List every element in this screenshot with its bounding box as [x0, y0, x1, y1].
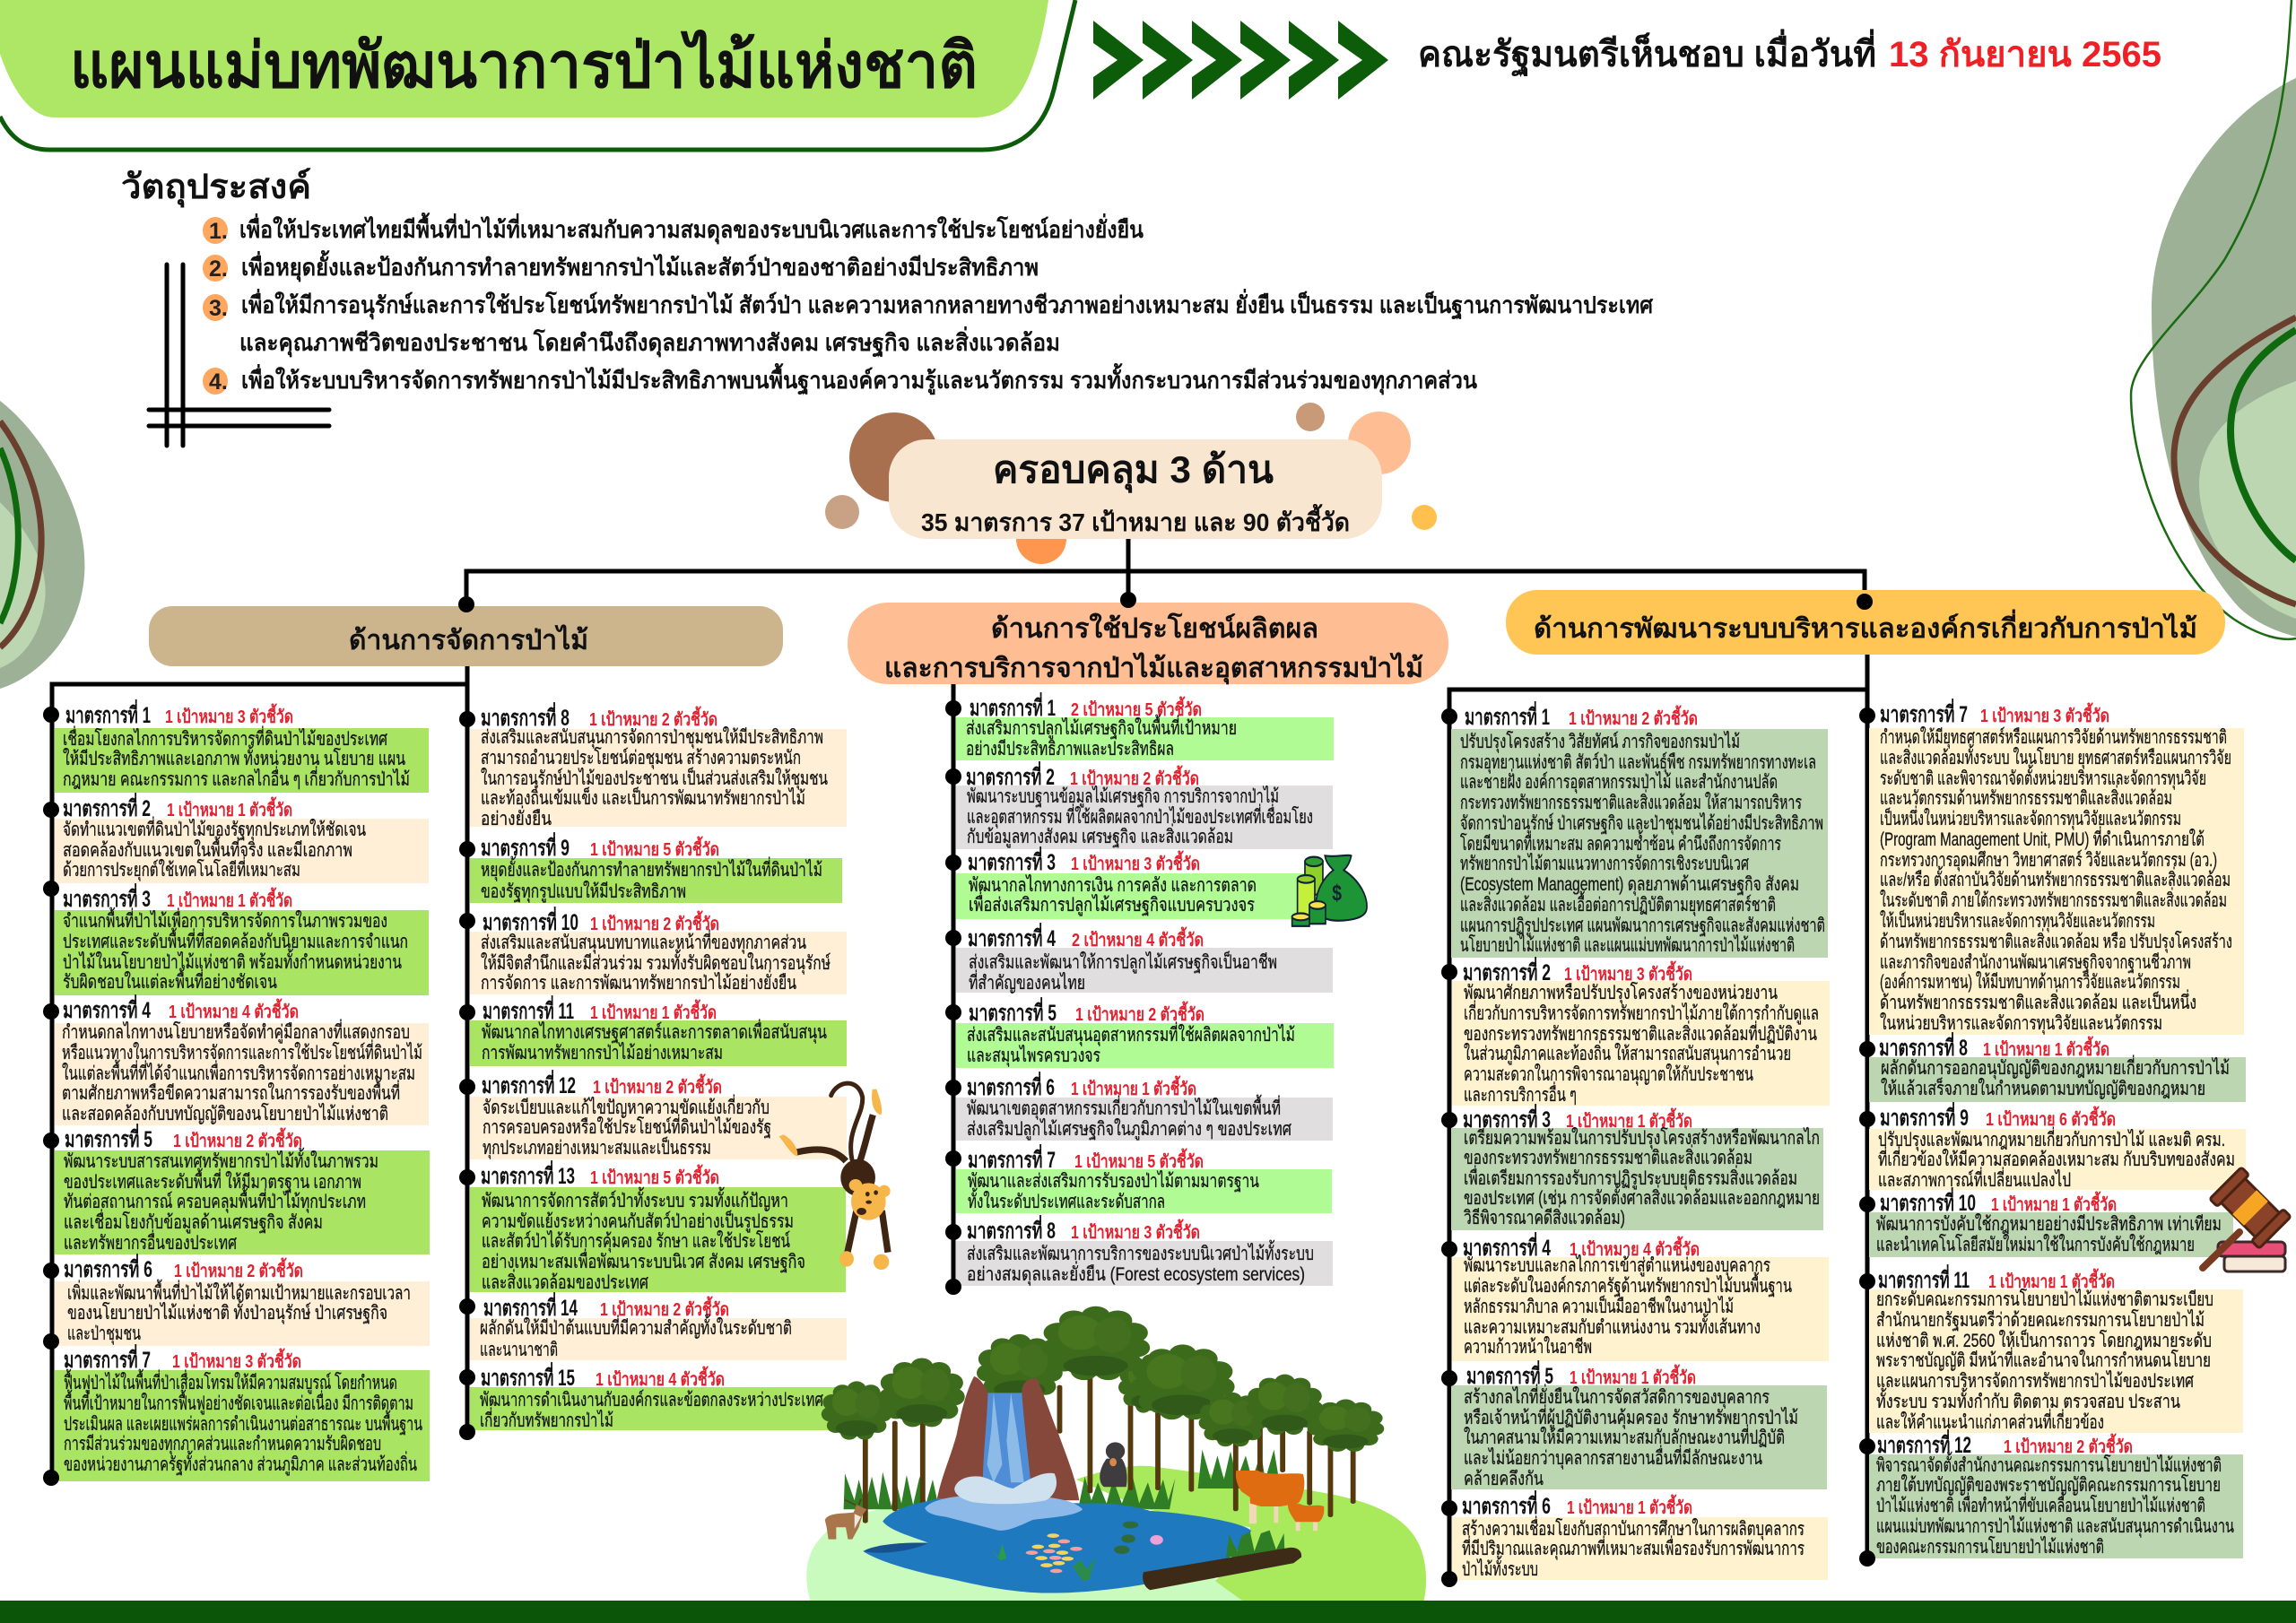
- measure 2: ด้วยการประยุกต์ใช้เทคโนโลยีที่เหมาะสม: [63, 856, 300, 881]
- measure 4: ในแต่ละพื้นที่ที่ได้จำแนกเพื่อการบริหารจัดการอย่างเหมาะสม: [62, 1060, 415, 1084]
- measure 5: สร้างกลไกที่ยั่งยืนในการจัดสวัสดิการของบุคลากร: [1464, 1384, 1770, 1409]
- measure 8: มาตรการที่ 8: [481, 702, 570, 731]
- measure 3: ป่าไม้ในนโยบายป่าไม้แห่งชาติ พร้อมทั้งกำหนดหน่วยงาน: [63, 949, 402, 973]
- measure 3: ประเทศและระดับพื้นที่ที่สอดคล้องกับนิยามและการจำแนก: [63, 928, 408, 952]
- measure 2: และอุตสาหกรรม ที่ใช้ผลิตผลจากป่าไม้ของประเทศที่เชื่อมโยง: [967, 803, 1313, 829]
- measure 2: ของกระทรวงทรัพยากรธรรมชาติและสิ่งแวดล้อมที่ปฏิบัติงาน: [1464, 1020, 1817, 1045]
- measure 5: หรือเจ้าหน้าที่ผู้ปฏิบัติงานคุ้มครอง รักษาทรัพยากรป่าไม้: [1464, 1404, 1798, 1429]
- measure 2: [1441, 957, 1830, 1106]
- measure 15: พัฒนาการดำเนินงานกับองค์กรและข้อตกลงระหว่างประเทศ: [480, 1389, 823, 1410]
- objective 3: และคุณภาพชีวิตของประชาชน โดยคำนึงถึงดุลยภาพทางสังคม เศรษฐกิจ และสิ่งแวดล้อม: [239, 325, 1060, 359]
- measure 4: ความก้าวหน้าในอาชีพ: [1464, 1336, 1592, 1358]
- measure 4: ส่งเสริมและพัฒนาให้การปลูกไม้เศรษฐกิจเป็นอาชีพ: [969, 950, 1277, 974]
- water pool: [863, 1499, 1251, 1593]
- measure 9: 1 เป้าหมาย 6 ตัวชี้วัด: [1986, 1106, 2116, 1130]
- measure 3: เตรียมความพร้อมในการปรับปรุงโครงสร้างหรือพัฒนากลไก: [1464, 1127, 1820, 1150]
- measure 4: และความเหมาะสมกับตำแหน่งงาน รวมทั้งเส้นทาง: [1464, 1314, 1761, 1338]
- measure 5: ส่งเสริมและสนับสนุนอุตสาหกรรมที่ใช้ผลิตผลจากป่าไม้: [967, 1021, 1295, 1046]
- objectives list: [203, 212, 1653, 396]
- measure 5: พัฒนาระบบสารสนเทศทรัพยากรป่าไม้ทั้งในภาพรวม: [64, 1148, 378, 1172]
- icon: money bag and coins: $: [1332, 881, 1342, 906]
- measure 7: ฟื้นฟูป่าไม้ในพื้นที่ป่าเสื่อมโทรมให้มีความสมบูรณ์ โดยกำหนด: [64, 1369, 397, 1394]
- title: แผนแม่บทพัฒนาการป่าไม้แห่งชาติ: [70, 29, 978, 100]
- measure 5: และไม่น้อยกว่าบุคลากรสายงานอื่นที่มีลักษณะงาน: [1464, 1445, 1762, 1470]
- measure 10: 1 เป้าหมาย 2 ตัวชี้วัด: [590, 910, 719, 934]
- measure 4: ที่สำคัญของคนไทย: [969, 969, 1085, 994]
- decoration: left leaf blob: [0, 401, 84, 689]
- measure 1: กรมอุทยานแห่งชาติ สัตว์ป่า และพันธุ์พืช กรมทรัพยากรทางทะเล: [1460, 751, 1816, 774]
- measure 10: [459, 907, 847, 994]
- measure 4: พัฒนาระบบและกลไกการเข้าสู่ตำแหน่งของบุคลากร: [1464, 1254, 1770, 1277]
- heading pill: administration: [1506, 590, 2225, 655]
- measure 1: ปรับปรุงโครงสร้าง วิสัยทัศน์ ภารกิจของกรมป่าไม้: [1460, 731, 1740, 753]
- measure 4: กำหนดกลไกทางนโยบายหรือจัดทำคู่มือกลางที่แสดงกรอบ: [62, 1019, 410, 1044]
- measure 7: 1 เป้าหมาย 5 ตัวชี้วัด: [1074, 1148, 1204, 1172]
- cabinet approval date: 13 กันยายน 2565: [1889, 35, 2161, 74]
- measure 13: พัฒนาการจัดการสัตว์ป่าทั้งระบบ รวมทั้งแก้ปัญหา: [482, 1187, 788, 1211]
- icon: money bag and coins: [1292, 855, 1367, 926]
- measure 6: 1 เป้าหมาย 2 ตัวชี้วัด: [174, 1257, 303, 1281]
- measure 1: โดยมีขนาดที่เหมาะสม ลดความซ้ำซ้อน คำนึงถึงการจัดการ: [1460, 830, 1781, 855]
- measure 13: อย่างเหมาะสมเพื่อพัฒนาระบบนิเวศ สังคม เศรษฐกิจ: [482, 1248, 805, 1272]
- measure 7: ทั้งในระดับประเทศและระดับสากล: [968, 1188, 1165, 1212]
- measure 7: ประเมินผล และเผยแพร่ผลการดำเนินงานต่อสาธารณะ บนพื้นฐาน: [64, 1410, 422, 1435]
- measure 1: และสิ่งแวดล้อม และเอื้อต่อการปฏิบัติตามยุทธศาสตร์ชาติ: [1460, 891, 1776, 916]
- tree trunks: [865, 1375, 1353, 1522]
- measure 4: 1 เป้าหมาย 4 ตัวชี้วัด: [1570, 1236, 1700, 1260]
- measure 11: 1 เป้าหมาย 1 ตัวชี้วัด: [590, 999, 717, 1023]
- measure 9: ของรัฐทุกรูปแบบให้มีประสิทธิภาพ: [481, 881, 686, 903]
- measure 2: พัฒนาศักยภาพหรือปรับปรุงโครงสร้างของหน่วยงาน: [1464, 982, 1778, 1004]
- measure 3: ของประเทศ (เช่น การจัดตั้งศาลสิ่งแวดล้อมและออกกฎหมาย: [1464, 1185, 1820, 1209]
- measure 4: 2 เป้าหมาย 4 ตัวชี้วัด: [1072, 926, 1204, 950]
- measure 8: [459, 702, 847, 829]
- measure 3: วิธีพิจารณาคดีสิ่งแวดล้อม): [1464, 1204, 1625, 1228]
- objective 3: [203, 288, 1653, 359]
- measure 2: พัฒนาระบบฐานข้อมูลไม้เศรษฐกิจ การบริการจากป่าไม้: [967, 785, 1279, 808]
- measure 12: 1 เป้าหมาย 2 ตัวชี้วัด: [2004, 1433, 2133, 1457]
- column 2: forest management measures 8-15: [459, 666, 847, 1440]
- measure 11: และแผนการบริหารจัดการทรัพยากรป่าไม้ของประเทศ: [1876, 1370, 2194, 1392]
- measure 14: [459, 1292, 847, 1360]
- objective 4: เพื่อให้ระบบบริหารจัดการทรัพยากรป่าไม้มีประสิทธิภาพบนพื้นฐานองค์ความรู้และนวัตกรรม รวมทั้งกระบวนการมีส่วนร่วมของทุกภาคส่วน: [241, 362, 1477, 396]
- measure 11: การพัฒนาทรัพยากรป่าไม้อย่างเหมาะสม: [482, 1042, 723, 1063]
- measure 1: แผนการปฏิรูปประเทศ แผนพัฒนาการเศรษฐกิจและสังคมแห่งชาติ: [1460, 916, 1825, 937]
- measure 5: 1 เป้าหมาย 2 ตัวชี้วัด: [1075, 1001, 1205, 1025]
- measure 15: มาตรการที่ 15: [481, 1362, 575, 1391]
- measure 6: และป่าชุมชน: [67, 1324, 141, 1345]
- column 1: forest management measures 1-7: [43, 684, 430, 1486]
- measure 7: การมีส่วนร่วมของทุกภาคส่วนและกำหนดความรับผิดชอบ: [64, 1434, 381, 1455]
- measure 6: 1 เป้าหมาย 1 ตัวชี้วัด: [1567, 1494, 1692, 1518]
- measure 7: ให้เป็นหน่วยบริหารและจัดการทุนวิจัยและนวัตกรรม: [1880, 908, 2155, 933]
- measure 13: และสิ่งแวดล้อมของประเทศ: [482, 1269, 648, 1293]
- measure 1: เชื่อมโยงกลไกการบริหารจัดการที่ดินป่าไม้ของประเทศ: [63, 725, 387, 750]
- measure 13: 1 เป้าหมาย 5 ตัวชี้วัด: [590, 1164, 719, 1188]
- measure 1: 1 เป้าหมาย 2 ตัวชี้วัด: [1569, 705, 1698, 729]
- decorative circles around summary: [825, 403, 1437, 564]
- measure 5: ทันต่อสถานการณ์ ครอบคลุมพื้นที่ป่าไม้ทุกประเภท: [64, 1188, 366, 1213]
- measure 7: [945, 1144, 1332, 1213]
- measure 4: หรือแนวทางในการบริหารจัดการและการใช้ประโยชน์ที่ดินป่าไม้: [62, 1039, 422, 1063]
- measure 4: มาตรการที่ 4: [63, 994, 151, 1023]
- measure 8: 1 เป้าหมาย 2 ตัวชี้วัด: [589, 706, 718, 730]
- measure 8: มาตรการที่ 8: [967, 1215, 1056, 1244]
- measure 10: มาตรการที่ 10: [1880, 1187, 1976, 1216]
- measure 14: มาตรการที่ 14: [483, 1292, 578, 1321]
- measure 4: 1 เป้าหมาย 4 ตัวชี้วัด: [169, 998, 299, 1022]
- measure 1: มาตรการที่ 1: [65, 699, 151, 728]
- measure 1: ทรัพยากรป่าไม้ตามแนวทางการจัดการเชิงระบบนิเวศ: [1460, 853, 1749, 874]
- measure 5: [1441, 1360, 1827, 1489]
- measure 8: 1 เป้าหมาย 3 ตัวชี้วัด: [1071, 1219, 1200, 1243]
- measure 12: มาตรการที่ 12: [482, 1070, 576, 1098]
- measure 10: 1 เป้าหมาย 1 ตัวชี้วัด: [1991, 1191, 2117, 1215]
- measure 7: มาตรการที่ 7: [968, 1144, 1056, 1173]
- fish school: [1026, 1533, 1083, 1573]
- measure 7: พัฒนาและส่งเสริมการรับรองป่าไม้ตามมาตรฐาน: [968, 1170, 1259, 1192]
- measure 10: ส่งเสริมและสนับสนุนบทบาทและหน้าที่ของทุกภาคส่วน: [481, 929, 806, 954]
- measure 7: ของหน่วยงานภาครัฐทั้งส่วนกลาง ส่วนภูมิภาค และส่วนท้องถิ่น: [64, 1451, 417, 1476]
- measure 6: [945, 1072, 1333, 1141]
- measure 7: 1 เป้าหมาย 3 ตัวชี้วัด: [172, 1348, 301, 1372]
- measure 7: 1 เป้าหมาย 3 ตัวชี้วัด: [1980, 702, 2109, 726]
- measure 6: มาตรการที่ 6: [64, 1254, 152, 1282]
- decoration: double cross lines: [149, 265, 329, 446]
- measure 14: ผลักดันให้มีป่าต้นแบบที่มีความสำคัญทั้งในระดับชาติ: [480, 1315, 792, 1339]
- measure 8: และท้องถิ่นเข้มแข็ง และเป็นการพัฒนาทรัพยากรป่าไม้: [481, 785, 805, 809]
- measure 8: [1859, 1032, 2246, 1102]
- measure 1: และชายฝั่ง องค์การอุตสาหกรรมป่าไม้ และสำนักงานปลัด: [1460, 768, 1778, 794]
- measure 11: พัฒนากลไกทางเศรษฐศาสตร์และการตลาดเพื่อสนับสนุน: [482, 1019, 827, 1044]
- measure 4: [1441, 1232, 1829, 1361]
- measure 7: ในหน่วยบริหารและจัดการทุนวิจัยและนวัตกรรม: [1880, 1012, 2162, 1035]
- measure 6: [1441, 1490, 1828, 1587]
- measure 1: ให้มีประสิทธิภาพและเอกภาพ ทั้งหน่วยงาน นโยบาย แผน: [63, 745, 405, 769]
- heading pill: utilisation: ด้านการใช้ประโยชน์ผลิตผล: [991, 612, 1318, 644]
- illustration: forest and waterfall scene: [806, 1306, 1426, 1601]
- measure 2: มาตรการที่ 2: [1463, 957, 1551, 985]
- animal: deer: [825, 1499, 866, 1540]
- measure 15: [459, 1362, 847, 1440]
- summary box: covers 3 areas: [889, 439, 1382, 539]
- measure 7: [43, 1333, 430, 1486]
- measure 13: และสัตว์ป่าได้รับการคุ้มครอง รักษา และใช้ประโยชน์: [482, 1230, 790, 1253]
- measure 11: [1859, 1264, 2243, 1433]
- measure 7: มาตรการที่ 7: [64, 1344, 151, 1373]
- measure 7: ด้านทรัพยากรธรรมชาติและสิ่งแวดล้อม และเป็นหนึ่ง: [1880, 989, 2196, 1013]
- measure 3: มาตรการที่ 3: [63, 883, 151, 912]
- measure 5: มาตรการที่ 5: [969, 997, 1057, 1026]
- measure 1: นโยบายป่าไม้แห่งชาติ และแผนแม่บทพัฒนาการป่าไม้แห่งชาติ: [1460, 934, 1795, 956]
- measure 4: [945, 923, 1333, 994]
- measure 1: ส่งเสริมการปลูกไม้เศรษฐกิจในพื้นที่เป้าหมาย: [966, 715, 1237, 740]
- heading: covers 3 areas: ครอบคลุม 3 ด้าน: [993, 448, 1274, 493]
- measure 8: ในการอนุรักษ์ป่าไม้ของประชาชน เป็นส่วนส่งเสริมให้ชุมชน: [481, 766, 828, 790]
- column 5: administration measures 7-12: [1859, 655, 2246, 1567]
- measure 11: มาตรการที่ 11: [1878, 1264, 1970, 1293]
- heading pill: utilisation: [848, 603, 1448, 685]
- heading pill: administration: ด้านการพัฒนาระบบบริหารและองค์กรเกี่ยวกับการป่าไม้: [1534, 609, 2197, 644]
- measure 1: อย่างมีประสิทธิภาพและประสิทธิผล: [966, 739, 1174, 759]
- measure 8: อย่างสมดุลและยั่งยืน (Forest ecosystem services): [967, 1261, 1305, 1286]
- measure 11: ทั้งระบบ รวมทั้งกำกับ ติดตาม ตรวจสอบ ประสาน: [1876, 1388, 2180, 1412]
- measure 5: 1 เป้าหมาย 2 ตัวชี้วัด: [173, 1127, 302, 1151]
- measure 3: เพื่อเตรียมการรองรับการปฏิรูประบบยุติธรรมสิ่งแวดล้อม: [1464, 1165, 1797, 1190]
- measure 7: มาตรการที่ 7: [1880, 699, 1968, 727]
- measure 4: มาตรการที่ 4: [1463, 1232, 1551, 1261]
- measure 1: มาตรการที่ 1: [970, 692, 1056, 721]
- measure 8: 1 เป้าหมาย 1 ตัวชี้วัด: [1983, 1036, 2109, 1060]
- measure 6: มาตรการที่ 6: [967, 1072, 1055, 1100]
- measure 6: 1 เป้าหมาย 1 ตัวชี้วัด: [1071, 1075, 1196, 1099]
- objective 1: เพื่อให้ประเทศไทยมีพื้นที่ป่าไม้ที่เหมาะสมกับความสมดุลของระบบนิเวศและการใช้ประโยชน์อย่างยั่งยืน: [239, 212, 1144, 245]
- measure 2: 1 เป้าหมาย 2 ตัวชี้วัด: [1070, 765, 1199, 789]
- measure 5: มาตรการที่ 5: [65, 1124, 152, 1152]
- measure 4: และสอดคล้องกับบทบัญญัติของนโยบายป่าไม้แห่งชาติ: [62, 1103, 388, 1124]
- measure 11: มาตรการที่ 11: [483, 995, 574, 1024]
- measure 2: [43, 793, 429, 883]
- measure 3: [945, 846, 1315, 919]
- measure 9: หยุดยั้งและป้องกันการทำลายทรัพยากรป่าไม้ในที่ดินป่าไม้: [481, 856, 822, 881]
- measure 7: [1859, 699, 2244, 1035]
- column 3: utilisation measures 1-8: [945, 684, 1334, 1295]
- measure 5: 1 เป้าหมาย 1 ตัวชี้วัด: [1570, 1364, 1696, 1388]
- measure 15: 1 เป้าหมาย 4 ตัวชี้วัด: [596, 1366, 725, 1390]
- measure 2: จัดทำแนวเขตที่ดินป่าไม้ของรัฐทุกประเภทให้ชัดเจน: [63, 816, 366, 841]
- measure 10: [1859, 1187, 2233, 1257]
- measure 2: และการบริการอื่น ๆ: [1464, 1081, 1577, 1106]
- objective 4: 4.: [209, 369, 228, 395]
- measure 6: ป่าไม้ทั้งระบบ: [1462, 1556, 1538, 1580]
- measure 9: มาตรการที่ 9: [481, 832, 570, 861]
- measure 12: ของคณะกรรมการนโยบายป่าไม้แห่งชาติ: [1876, 1536, 2104, 1558]
- measure 6: พัฒนาเขตอุตสาหกรรมเกี่ยวกับการป่าไม้ในเขตพื้นที่: [967, 1095, 1281, 1120]
- measure 3: เพื่อส่งเสริมการปลูกไม้เศรษฐกิจแบบครบวงจร: [969, 891, 1255, 916]
- cabinet approval date: คณะรัฐมนตรีเห็นชอบ เมื่อวันที่: [1418, 29, 1876, 78]
- measure 1: 2 เป้าหมาย 5 ตัวชี้วัด: [1071, 696, 1202, 720]
- summary counts: 35 มาตรการ 37 เป้าหมาย และ 90 ตัวชี้วัด: [921, 503, 1350, 536]
- bottom bar: [0, 1601, 2296, 1623]
- measure 2: สอดคล้องกับแนวเขตในพื้นที่จริง และมีเอกภาพ: [63, 837, 352, 861]
- measure 1: กฎหมาย คณะกรรมการ และกลไกอื่น ๆ เกี่ยวกับการป่าไม้: [63, 766, 410, 790]
- measure 1: (Ecosystem Management) ดุลยภาพด้านเศรษฐกิจ สังคม: [1460, 874, 1799, 896]
- water plants and lotus: [991, 1522, 1163, 1581]
- measure 5: มาตรการที่ 5: [1466, 1360, 1553, 1389]
- measure 6: ของนโยบายป่าไม้แห่งชาติ ทั้งป่าอนุรักษ์ ป่าเศรษฐกิจ: [67, 1299, 387, 1324]
- ground: [806, 1466, 1426, 1601]
- measure 3: [43, 881, 429, 995]
- measure 5: ในภาคสนามให้มีความเหมาะสมกับลักษณะงานที่ปฏิบัติ: [1464, 1424, 1785, 1448]
- front grass: [1226, 1531, 1285, 1558]
- measure 5: และทรัพยากรอื่นของประเทศ: [64, 1229, 237, 1254]
- measure 9: และสภาพการณ์ที่เปลี่ยนแปลงไป: [1878, 1167, 2071, 1191]
- measure 3: 1 เป้าหมาย 3 ตัวชี้วัด: [1071, 850, 1200, 874]
- measure 4: [43, 994, 429, 1125]
- measure 7: พื้นที่เป้าหมายในการฟื้นฟูอย่างชัดเจนและต่อเนื่อง มีการติดตาม: [64, 1390, 413, 1415]
- objective 2: 2.: [209, 256, 228, 282]
- measure 3: ของกระทรวงทรัพยากรธรรมชาติและสิ่งแวดล้อม: [1464, 1144, 1752, 1168]
- decoration: right leaf blob: [2131, 0, 2296, 639]
- tree crowns: [822, 1306, 1384, 1452]
- measure 8: อย่างยั่งยืน: [481, 805, 552, 829]
- measure 13: ความขัดแย้งระหว่างคนกับสัตว์ป่าอย่างเป็นรูปธรรม: [482, 1209, 794, 1233]
- measure 10: มาตรการที่ 10: [483, 907, 578, 935]
- measure 12: 1 เป้าหมาย 2 ตัวชี้วัด: [593, 1073, 722, 1098]
- measure 11: [459, 995, 847, 1066]
- measure 1: มาตรการที่ 1: [1465, 701, 1550, 730]
- measure 4: มาตรการที่ 4: [968, 923, 1056, 951]
- connector dots on pills: [458, 592, 1873, 612]
- heading pill: utilisation: และการบริการจากป่าไม้และอุตสาหกรรมป่าไม้: [884, 652, 1423, 685]
- measure 2: 1 เป้าหมาย 1 ตัวชี้วัด: [167, 796, 292, 820]
- measure 2: เกี่ยวกับการบริหารจัดการทรัพยากรป่าไม้ภายใต้การกำกับดูแล: [1464, 1000, 1819, 1025]
- measure 12: ทุกประเภทอย่างเหมาะสมและเป็นธรรม: [483, 1135, 711, 1159]
- measure 5: [43, 1124, 430, 1254]
- measure 2: [945, 761, 1333, 849]
- animal: cow and calf: [1236, 1471, 1324, 1531]
- icon: chevron arrows: [1093, 21, 1388, 100]
- column 4: administration measures 1-6: [1441, 690, 1830, 1587]
- heading pill: forest management: [149, 606, 783, 666]
- icon: monkey: [779, 1083, 891, 1270]
- measure 2: กับข้อมูลทางสังคม เศรษฐกิจ และสิ่งแวดล้อม: [967, 823, 1233, 848]
- header title banner: [0, 0, 1075, 150]
- measure 14: 1 เป้าหมาย 2 ตัวชี้วัด: [600, 1296, 729, 1320]
- measure 8: สามารถอำนวยประโยชน์ต่อชุมชน สร้างความตระหนัก: [481, 747, 801, 769]
- measure 1: กระทรวงทรัพยากรธรรมชาติและสิ่งแวดล้อม ให้สามารถบริหาร: [1460, 789, 1802, 813]
- measure 1: จัดการป่าอนุรักษ์ ป่าเศรษฐกิจ และป่าชุมชนได้อย่างมีประสิทธิภาพ: [1460, 812, 1823, 835]
- measure 2: มาตรการที่ 2: [63, 793, 151, 821]
- measure 9: 1 เป้าหมาย 5 ตัวชี้วัด: [590, 836, 719, 860]
- measure 4: หลักธรรมาภิบาล ความเป็นมืออาชีพในงานป่าไม้: [1464, 1294, 1734, 1317]
- measure 13: [459, 1160, 846, 1293]
- measure 6: ที่มีปริมาณและคุณภาพที่เหมาะสมเพื่อรองรับการพัฒนาการ: [1462, 1535, 1805, 1560]
- measure 10: ให้มีจิตสำนึกและมีส่วนร่วม รวมทั้งรับผิดชอบในการอนุรักษ์: [481, 950, 831, 975]
- measure 5: และสมุนไพรครบวงจร: [967, 1045, 1100, 1067]
- measure 1: [1441, 701, 1828, 958]
- measure 5: [945, 997, 1334, 1068]
- measure 6: [43, 1254, 430, 1346]
- measure 6: ส่งเสริมปลูกไม้เศรษฐกิจในภูมิภาคต่าง ๆ ของประเทศ: [967, 1118, 1292, 1141]
- measure 3: พัฒนากลไกทางการเงิน การคลัง และการตลาด: [969, 874, 1257, 896]
- measure 9: [459, 832, 842, 903]
- measure 2: มาตรการที่ 2: [966, 761, 1055, 790]
- objective 3: เพื่อให้มีการอนุรักษ์และการใช้ประโยชน์ทรัพยากรป่าไม้ สัตว์ป่า และความหลากหลายทางชีวภาพอย่างเหมาะสม ยั่งยืน เป็นธรรม และเป็นฐานการพัฒนาประเทศ: [241, 288, 1653, 321]
- measure 12: มาตรการที่ 12: [1877, 1429, 1971, 1458]
- measure 6: สร้างความเชื่อมโยงกับสถาบันการศึกษาในการผลิตบุคลากร: [1462, 1515, 1805, 1541]
- measure 6: มาตรการที่ 6: [1462, 1490, 1551, 1519]
- cabinet approval date: [1418, 29, 2161, 78]
- fallen log: [1143, 1548, 1301, 1590]
- icon: gavel and books: [2203, 1167, 2291, 1271]
- waterfall and splash: [925, 1393, 1083, 1531]
- waterfall rocks: [937, 1376, 1079, 1500]
- measure 3: รับผิดชอบในแต่ละพื้นที่อย่างชัดเจน: [63, 968, 277, 993]
- measure 12: [459, 1070, 847, 1159]
- measure 8: มาตรการที่ 8: [1879, 1032, 1968, 1061]
- measure 3: 1 เป้าหมาย 1 ตัวชี้วัด: [1566, 1107, 1692, 1132]
- measure 9: มาตรการที่ 9: [1880, 1102, 1969, 1131]
- measure 11: 1 เป้าหมาย 1 ตัวชี้วัด: [1988, 1268, 2115, 1292]
- measure 3: มาตรการที่ 3: [1463, 1104, 1551, 1133]
- measure 6: เพิ่มและพัฒนาพื้นที่ป่าไม้ให้ได้ตามเป้าหมายและกรอบเวลา: [67, 1280, 411, 1304]
- measure 12: [1859, 1429, 2243, 1567]
- grass clumps: [844, 1450, 1281, 1509]
- measure 12: การครอบครองหรือใช้ประโยชน์ที่ดินป่าไม้ของรัฐ: [483, 1114, 771, 1138]
- measure 9: [1859, 1102, 2246, 1191]
- measure 2: 1 เป้าหมาย 3 ตัวชี้วัด: [1564, 960, 1692, 985]
- heading pill: forest management: ด้านการจัดการป่าไม้: [349, 624, 588, 655]
- objective 1: 1.: [209, 219, 228, 244]
- measure 13: มาตรการที่ 13: [481, 1160, 575, 1189]
- measure 4: ตามศักยภาพหรือขีดความสามารถในการรองรับของพื้นที่: [62, 1080, 400, 1104]
- measure 2: ในส่วนภูมิภาคและท้องถิ่น ให้สามารถสนับสนุนการอำนวย: [1464, 1040, 1791, 1065]
- measure 8: ส่งเสริมและพัฒนาการบริการของระบบนิเวศป่าไม้ทั้งระบบ: [967, 1240, 1314, 1264]
- measure 5: คล้ายคลึงกัน: [1464, 1469, 1544, 1489]
- measure 3: มาตรการที่ 3: [968, 846, 1056, 875]
- measure 2: ความสะดวกในการพิจารณาอนุญาตให้กับประชาชน: [1464, 1063, 1753, 1086]
- measure 5: ของประเทศและระดับพื้นที่ ให้มีมาตรฐาน เอกภาพ: [64, 1168, 361, 1193]
- measure 12: จัดระเบียบและแก้ไขปัญหาความขัดแย้งเกี่ยวกับ: [483, 1094, 770, 1118]
- measure 8: [945, 1215, 1333, 1295]
- measure 1: [43, 699, 429, 793]
- measure 14: และนานาชาติ: [480, 1340, 558, 1360]
- measure 3: [1441, 1104, 1823, 1230]
- measure 5: และเชื่อมโยงกับข้อมูลด้านเศรษฐกิจ สังคม: [64, 1209, 323, 1234]
- animal: sun bear: [1100, 1442, 1127, 1487]
- measure 8: ส่งเสริมและสนับสนุนการจัดการป่าชุมชนให้มีประสิทธิภาพ: [481, 726, 823, 749]
- measure 1: 1 เป้าหมาย 3 ตัวชี้วัด: [165, 703, 293, 727]
- measure 1: [945, 692, 1334, 760]
- heading: objectives: วัตถุประสงค์: [121, 168, 311, 208]
- measure 3: จำแนกพื้นที่ป่าไม้เพื่อการบริหารจัดการในภาพรวมของ: [63, 907, 387, 932]
- measure 3: 1 เป้าหมาย 1 ตัวชี้วัด: [167, 887, 292, 911]
- measure 15: เกี่ยวกับทรัพยากรป่าไม้: [480, 1407, 613, 1431]
- measure 11: และให้คำแนะนำแก่ภาคส่วนที่เกี่ยวข้อง: [1876, 1409, 2104, 1433]
- measure 4: แต่ละระดับในองค์กรภาครัฐด้านทรัพยากรป่าไม้บนพื้นฐาน: [1464, 1272, 1792, 1297]
- objective 2: เพื่อหยุดยั้งและป้องกันการทำลายทรัพยากรป่าไม้และสัตว์ป่าของชาติอย่างมีประสิทธิภาพ: [241, 249, 1039, 282]
- objective 3: 3.: [209, 296, 228, 321]
- measure 10: การจัดการ และการพัฒนาทรัพยากรป่าไม้อย่างยั่งยืน: [481, 969, 796, 994]
- connector lines: [52, 539, 1867, 690]
